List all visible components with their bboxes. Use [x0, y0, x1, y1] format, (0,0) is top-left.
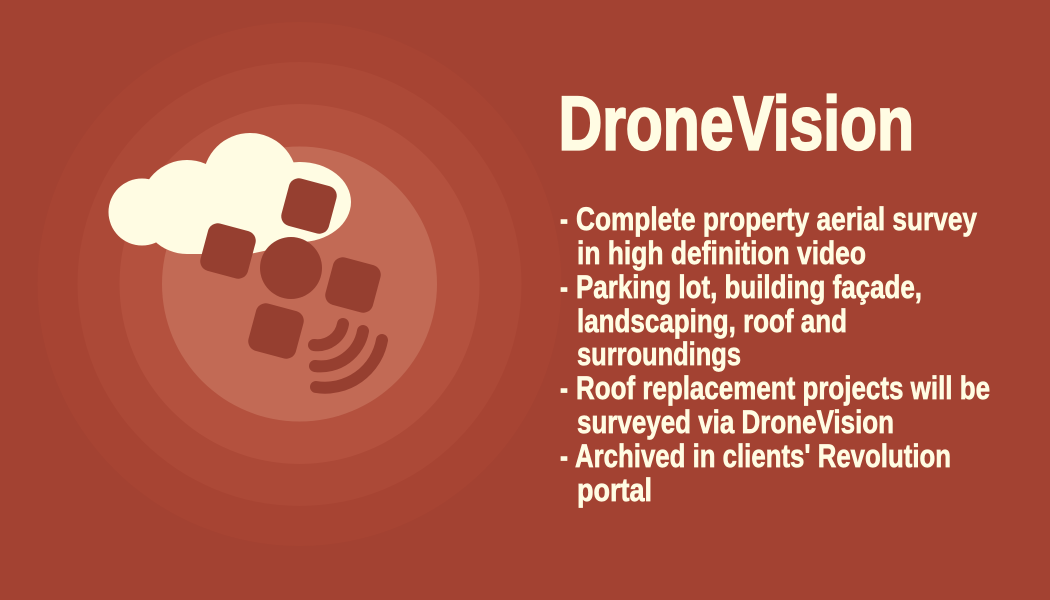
icon: signal waves: [314, 324, 382, 388]
bullet list: -: [560, 201, 568, 237]
title: DroneVision: [558, 82, 914, 166]
icon: drone: [198, 176, 383, 361]
icon: cloud: [108, 133, 351, 254]
bullet list: -: [560, 438, 568, 474]
bullet list: Parking lot, building façade,: [576, 269, 922, 305]
bullet list: [560, 201, 990, 508]
bullet list: landscaping, roof and: [577, 303, 847, 339]
bullet list: -: [560, 269, 568, 305]
bullet list: Archived in clients' Revolution: [575, 438, 951, 474]
bullet list: in high definition video: [577, 235, 866, 271]
concentric background circles: [38, 22, 562, 546]
bullet list: surveyed via DroneVision: [577, 404, 894, 440]
bullet list: surroundings: [577, 336, 741, 372]
bullet list: portal: [577, 472, 652, 508]
bullet list: -: [560, 370, 568, 406]
